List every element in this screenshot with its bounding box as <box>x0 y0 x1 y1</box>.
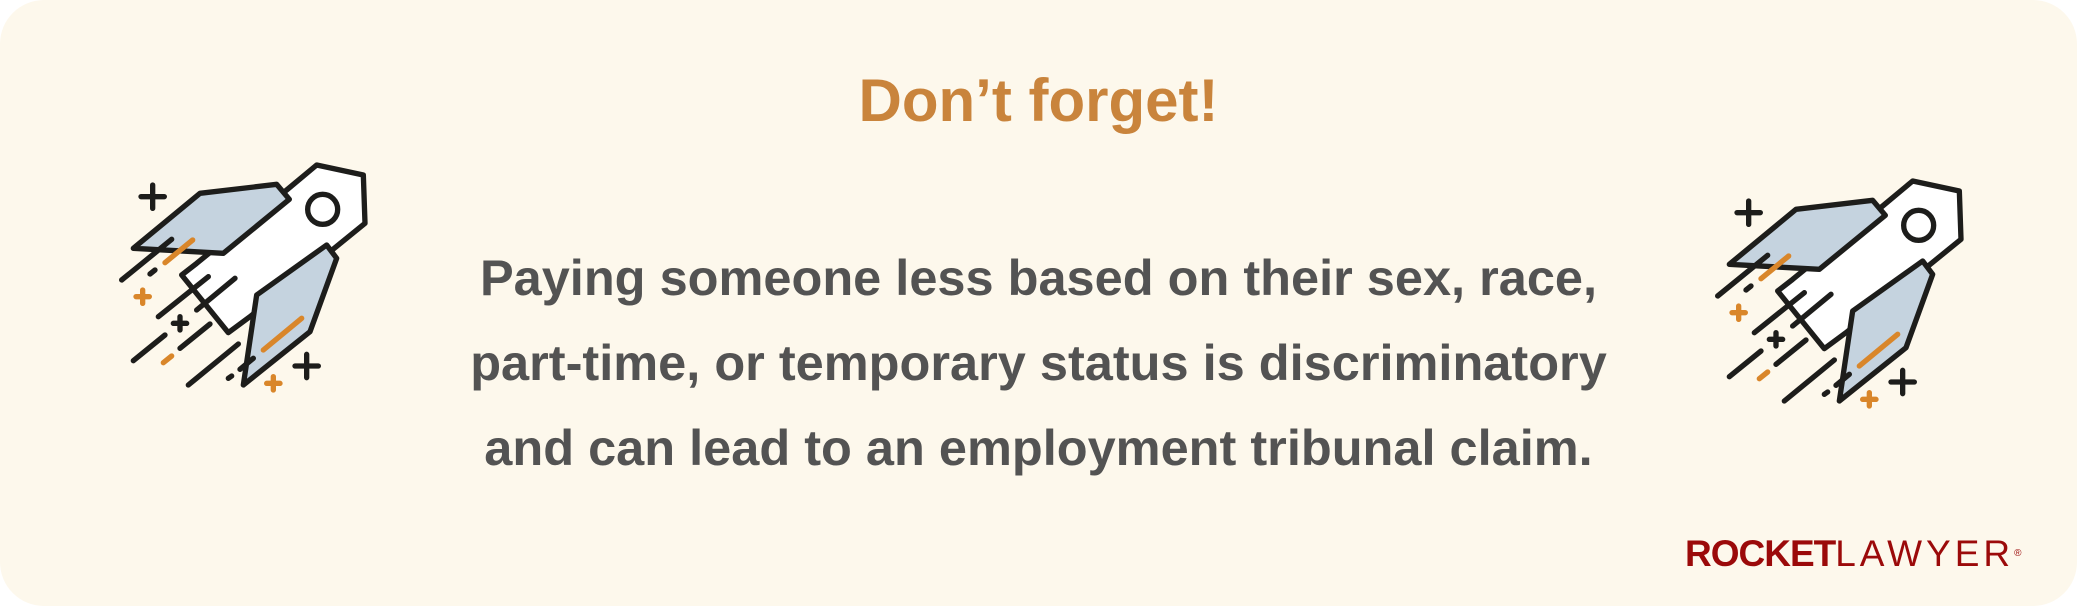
body text: and can lead to an employment tribunal claim. <box>484 419 1593 476</box>
logo: Rocket Lawyer: ROCKETLAWYER® <box>1685 533 2022 574</box>
icon: left rocket <box>119 162 368 393</box>
body text <box>470 249 1607 476</box>
body text: Paying someone less based on their sex, race, <box>480 249 1597 306</box>
title: Don’t forget! <box>859 67 1218 134</box>
body text: part-time, or temporary status is discriminatory <box>470 334 1607 391</box>
icon: right rocket <box>1715 178 1964 409</box>
